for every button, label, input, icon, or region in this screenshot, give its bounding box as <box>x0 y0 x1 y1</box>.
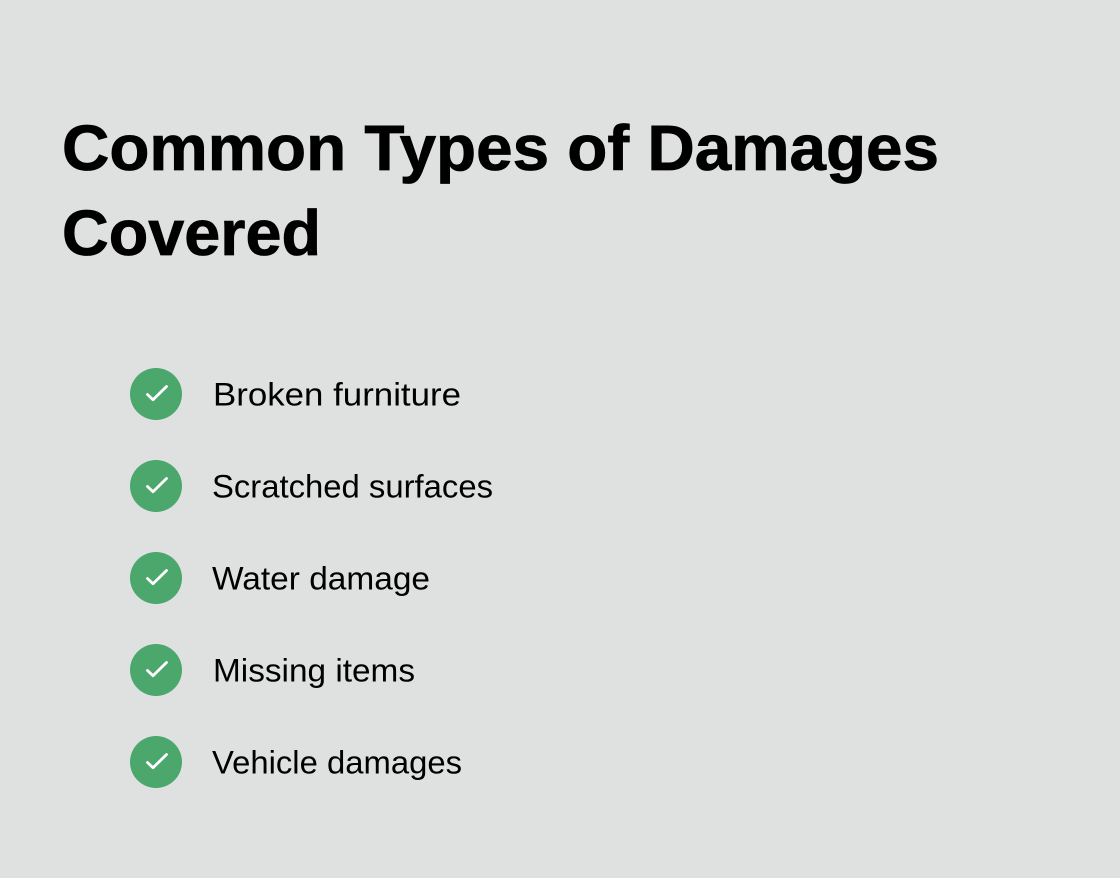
title: Covered <box>62 197 321 269</box>
list item: Missing items <box>130 644 415 696</box>
list item: Scratched surfaces: Scratched surfaces <box>212 468 493 504</box>
list item: Scratched surfaces <box>130 460 493 512</box>
title: Common Types of Damages <box>62 112 939 184</box>
title <box>62 112 939 269</box>
list item: Water damage: Water damage <box>212 560 430 596</box>
list item: Broken furniture: Broken furniture <box>213 376 461 412</box>
list item: Vehicle damages: Vehicle damages <box>212 744 462 780</box>
list item: Broken furniture <box>130 368 461 420</box>
checklist <box>130 368 493 788</box>
list item: Missing items: Missing items <box>213 652 415 688</box>
list item: Water damage <box>130 552 430 604</box>
list item: Vehicle damages <box>130 736 462 788</box>
